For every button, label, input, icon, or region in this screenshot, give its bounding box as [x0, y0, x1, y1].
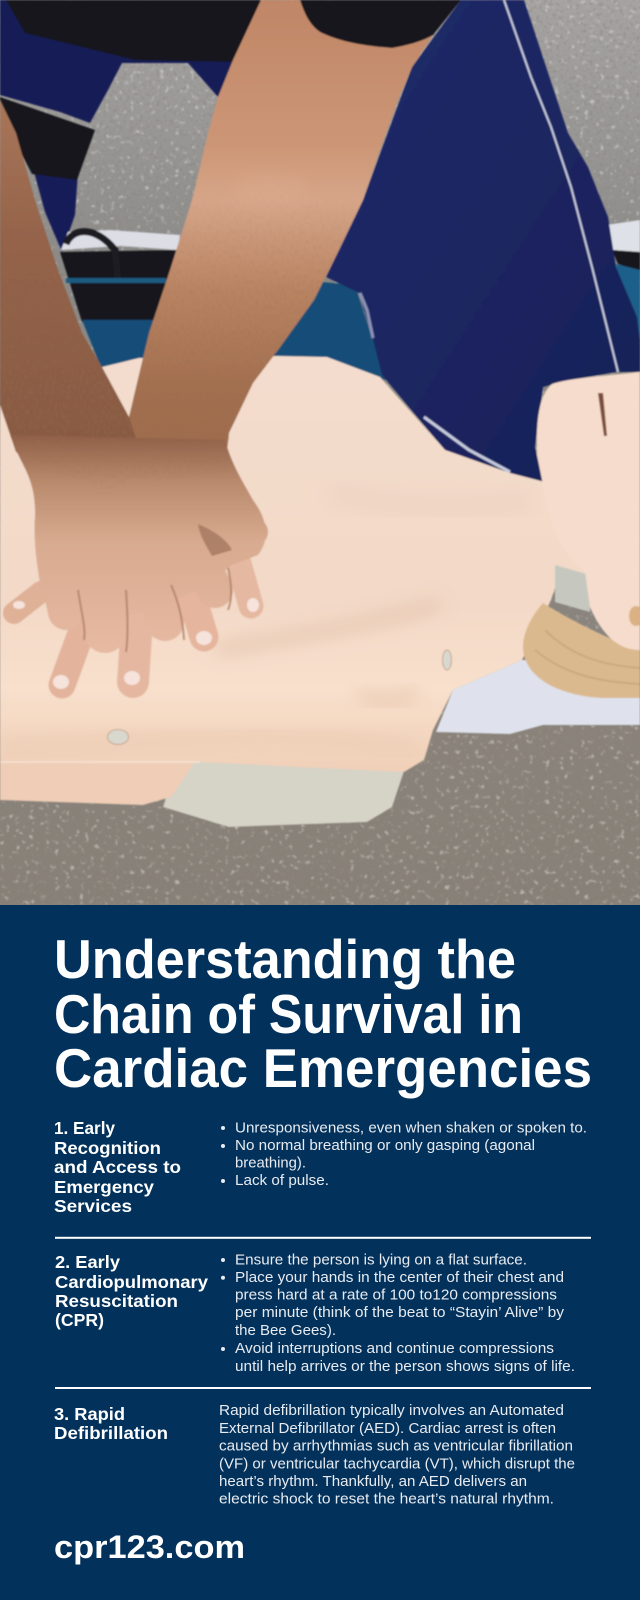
- section 3 paragraph: caused by arrhythmias such as ventricular fibrillation: [219, 1439, 573, 1455]
- snap button lower: [108, 730, 128, 744]
- left forearm: [0, 100, 155, 500]
- section 1 heading: Recognition: [54, 1138, 161, 1158]
- mouth slit: [598, 393, 607, 436]
- section 1 heading: [54, 1118, 181, 1216]
- mannequin torso: [0, 356, 600, 772]
- elbow highlight: [230, 174, 310, 206]
- section 2 bullet list: Ensure the person is lying on a flat surface.: [235, 1252, 527, 1268]
- section 1 heading: Emergency: [54, 1177, 154, 1197]
- ear: [629, 606, 640, 626]
- section 2 bullet list: [221, 1252, 575, 1375]
- black sleeve: [300, 0, 461, 48]
- asphalt ground: [0, 0, 640, 906]
- section 1 heading: and Access to: [54, 1157, 181, 1177]
- navy lower leg: [34, 172, 78, 252]
- forearm hair texture: [228, 438, 229, 440]
- title: Chain of Survival in: [54, 983, 523, 1045]
- trouser stripe: [504, 0, 618, 372]
- knuckle crease lines: [78, 568, 231, 652]
- rest ridges: [535, 630, 640, 684]
- right forearm: [129, 0, 433, 480]
- white bag edge right: [606, 220, 640, 252]
- grey mannequin base: [163, 755, 406, 827]
- section 2 heading: Cardiopulmonary: [55, 1272, 208, 1292]
- section 1 bullet list: Lack of pulse.: [235, 1173, 329, 1189]
- section 1 bullet list: [221, 1120, 587, 1189]
- neck connector: [555, 565, 590, 612]
- section 2 bullet list: Place your hands in the center of their chest and: [235, 1270, 564, 1286]
- bottom hand fingers: [14, 560, 251, 685]
- white paper sheet: [436, 660, 640, 734]
- section 3 heading: 3. Rapid: [54, 1404, 125, 1424]
- section 3 paragraph: External Defibrillator (AED). Cardiac arrest is often: [219, 1421, 556, 1437]
- photo: CPR on a training mannequin: [0, 0, 640, 906]
- section 1 heading: 1. Early: [54, 1118, 115, 1138]
- section 3 paragraph: electric shock to reset the heart’s natural rhythm.: [219, 1492, 554, 1508]
- teal mat centre: [270, 280, 386, 380]
- navy trousers: [326, 0, 640, 482]
- section 2 bullet list: Avoid interruptions and continue compressions: [235, 1341, 554, 1357]
- section 2 heading: 2. Early: [55, 1252, 120, 1272]
- divider: [55, 1237, 591, 1239]
- section 3 heading: Defibrillation: [54, 1423, 168, 1443]
- snap button upper: [442, 650, 452, 670]
- gap between thumb and fingers: [198, 524, 232, 556]
- black shirt: [6, 0, 270, 62]
- mannequin head: [537, 372, 640, 650]
- section 2 heading: Resuscitation: [55, 1291, 178, 1311]
- black strap: [0, 97, 95, 180]
- bag carry strap: [66, 232, 118, 280]
- torso shading: [0, 490, 530, 750]
- panel: navy background: [0, 905, 640, 1600]
- section 2 bullet list: until help arrives or the person shows signs of life.: [235, 1359, 575, 1375]
- top hand: [10, 435, 266, 652]
- section 1 bullet list: breathing).: [235, 1156, 306, 1172]
- website footer: cpr123.com: [54, 1529, 245, 1565]
- panel seam line: [0, 761, 200, 763]
- section 3 paragraph: [219, 1403, 575, 1508]
- teal mat right: [616, 264, 640, 372]
- section 3 paragraph: Rapid defibrillation typically involves an Automated: [219, 1403, 564, 1419]
- section 2 heading: (CPR): [55, 1310, 104, 1330]
- section 2 bullet list: the Bee Gees).: [235, 1323, 336, 1339]
- black bag right: [612, 250, 640, 272]
- title: Cardiac Emergencies: [54, 1037, 592, 1099]
- section 2 heading: [55, 1252, 208, 1330]
- section 1 bullet list: No normal breathing or only gasping (agonal: [235, 1138, 535, 1154]
- fingernails: [13, 598, 259, 689]
- trouser lower stripe: [424, 417, 510, 472]
- teal bag stripe: [66, 278, 166, 283]
- section 2 bullet list: per minute (think of the beat to “Stayin’ Alive” by: [235, 1305, 565, 1321]
- section 3 heading: [54, 1404, 168, 1443]
- title: [54, 928, 592, 1099]
- teal mat between arms: [82, 320, 165, 370]
- section 2 bullet list: press hard at a rate of 100 to120 compressions: [235, 1288, 557, 1304]
- title: Understanding the: [54, 928, 516, 990]
- divider: [55, 1387, 591, 1389]
- white bag edge left: [61, 230, 180, 250]
- black bag left: [60, 250, 178, 322]
- section 1 bullet list: Unresponsiveness, even when shaken or spoken to.: [235, 1120, 587, 1136]
- section 3 paragraph: heart’s rhythm. Thankfully, an AED delivers an: [219, 1474, 527, 1490]
- section 3 paragraph: (VF) or ventricular tachycardia (VT), which disrupt the: [219, 1456, 575, 1472]
- section 1 heading: Services: [54, 1196, 132, 1216]
- peach panel: [0, 755, 200, 805]
- tan head rest: [523, 603, 640, 698]
- trouser pale inner stripe: [360, 293, 373, 338]
- navy jacket behind arms: [0, 0, 270, 123]
